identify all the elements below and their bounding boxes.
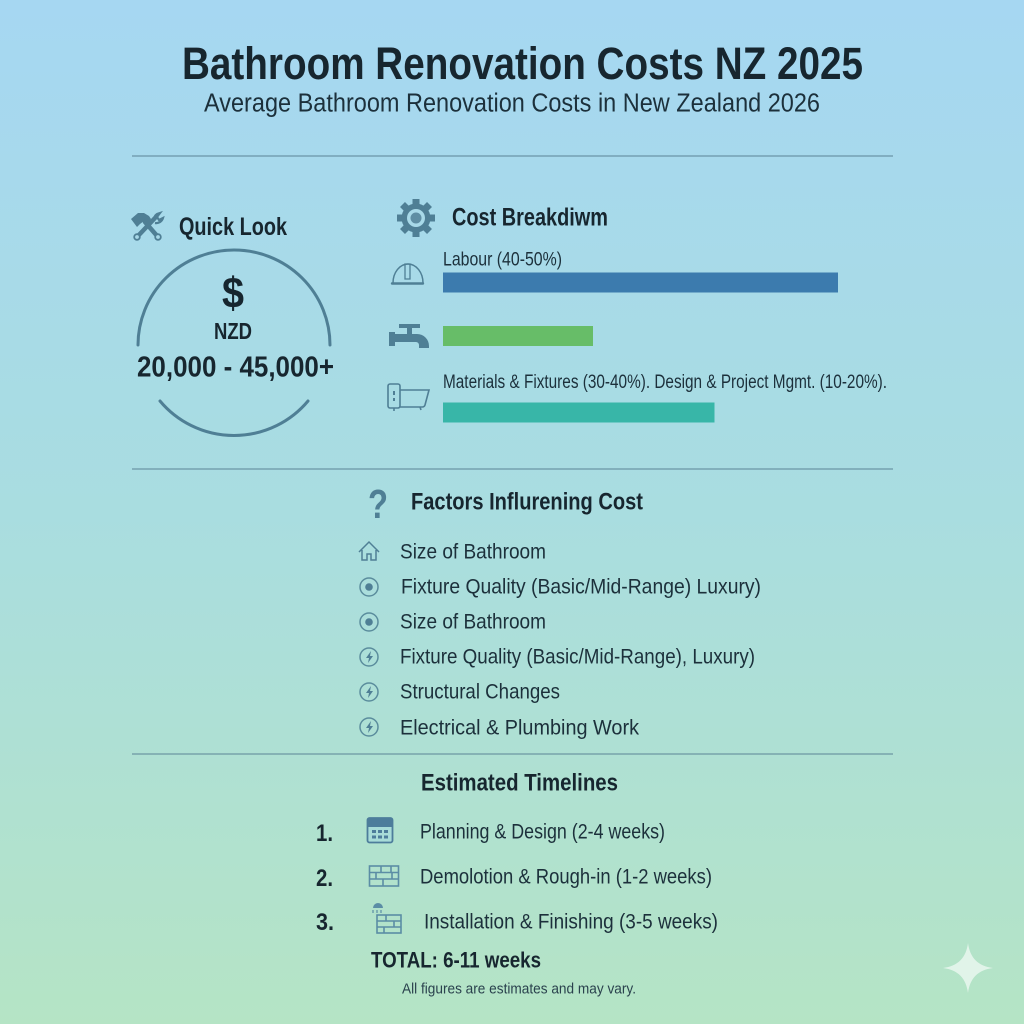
item 2: Fixture Quality (Basic/Mid-Range) Luxury): [401, 574, 761, 598]
icon: bolt circle 1: [360, 648, 378, 666]
label: labour: Labour (40-50%): [443, 248, 562, 270]
price range: 20,000 - 45,000+: [137, 352, 334, 384]
panel: timelines: [316, 770, 718, 998]
icon: tap: [389, 324, 429, 348]
step number 1: 1.: [316, 820, 333, 847]
bar: labour: [443, 272, 838, 292]
icon: bathtub: [388, 384, 429, 411]
icon: brick wall: [370, 866, 398, 886]
heading: factors: Factors Influrening Cost: [411, 488, 643, 516]
icon: target 1: [360, 578, 378, 596]
item 5: Structural Changes: [400, 680, 560, 704]
icon: target 2: [360, 613, 378, 631]
icon: shower and bricks: [373, 903, 401, 933]
subtitle: Average Bathroom Renovation Costs in New Zealand 2026: [204, 90, 820, 118]
total: TOTAL: 6-11 weeks: [371, 948, 541, 973]
heading: cost breakdown: Cost Breakdiwm: [452, 204, 608, 232]
title: Bathroom Renovation Costs NZ 2025: [182, 38, 863, 89]
step number 3: 3.: [316, 909, 334, 936]
footnote: All figures are estimates and may vary.: [402, 980, 636, 998]
icon: bolt circle 2: [360, 683, 378, 701]
item 6: Electrical & Plumbing Work: [400, 716, 639, 740]
panel: cost breakdown: [388, 199, 887, 422]
icon: calendar: [368, 818, 392, 842]
panel: quick look: [131, 213, 334, 435]
heading: timelines: Estimated Timelines: [421, 770, 618, 796]
icon: gear: [397, 199, 435, 237]
icon: hammer and wrench: [131, 213, 163, 240]
step number 2: 2.: [316, 865, 333, 892]
icon: question mark: ?: [368, 481, 388, 527]
icon: house: [359, 542, 379, 560]
heading: quick look: Quick Look: [179, 213, 287, 241]
icon: sparkle: [943, 943, 993, 993]
item 1: Size of Bathroom: [400, 540, 546, 564]
step 3 text: Installation & Finishing (3-5 weeks): [424, 910, 718, 934]
step 2 text: Demolotion & Rough-in (1-2 weeks): [420, 864, 712, 888]
price ring: [138, 250, 330, 435]
icon: bolt circle 3: [360, 718, 378, 736]
step 1 text: Planning & Design (2-4 weeks): [420, 820, 665, 844]
bar: green: [443, 326, 593, 346]
label: materials and design: Materials & Fixtures (30-40%). Design & Project Mgmt. (10-20%).: [443, 372, 887, 393]
item 4: Fixture Quality (Basic/Mid-Range), Luxury): [400, 644, 755, 668]
panel: factors: [359, 481, 761, 740]
bar: materials: [443, 402, 714, 422]
currency label: NZD: [214, 318, 252, 344]
dollar sign: $: [222, 269, 244, 318]
icon: hard hat: [392, 264, 423, 284]
item 3: Size of Bathroom: [400, 610, 546, 634]
